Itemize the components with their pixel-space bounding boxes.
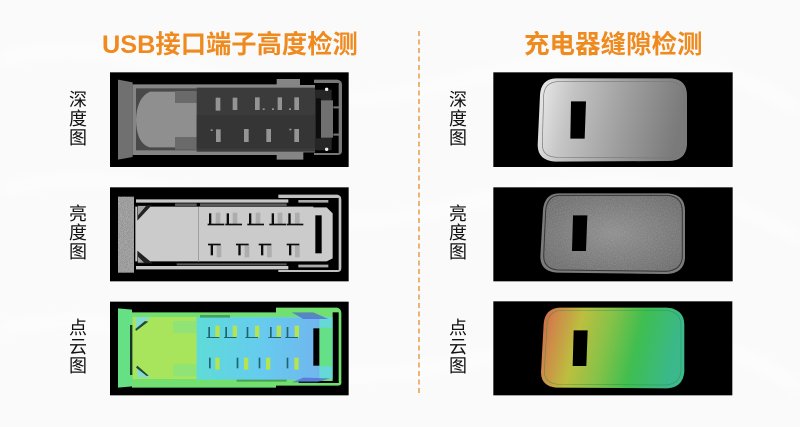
- label: depth map left: 图: [69, 128, 87, 148]
- image: charger point cloud: [493, 301, 732, 395]
- image: USB depth map: [110, 72, 349, 167]
- title: USB terminal height inspection: USB接口端子高度检测: [102, 31, 358, 59]
- label: depth map right: 图: [449, 128, 467, 148]
- dashed divider: [418, 31, 420, 396]
- label: brightness map left: 图: [69, 242, 87, 262]
- label: point cloud right: 点: [449, 318, 467, 338]
- label: point cloud left: 图: [69, 356, 87, 376]
- label: brightness map left: 亮: [69, 204, 87, 224]
- label: depth map left: 度: [69, 109, 87, 129]
- label: brightness map right: 亮: [449, 204, 467, 224]
- image: USB brightness map: [110, 187, 349, 281]
- title: charger gap inspection: 充电器缝隙检测: [524, 31, 703, 59]
- label: point cloud left: 点: [69, 318, 87, 338]
- image: USB point cloud: [110, 302, 349, 395]
- label: depth map right: 度: [449, 109, 467, 129]
- label: point cloud right: 图: [449, 356, 467, 376]
- label: brightness map left: 度: [69, 223, 87, 243]
- label: brightness map right: 图: [449, 242, 467, 262]
- label: depth map left: 深: [69, 90, 87, 110]
- label: point cloud left: 云: [69, 337, 87, 357]
- image: charger brightness map: [493, 187, 733, 281]
- label: point cloud right: 云: [449, 337, 467, 357]
- label: depth map right: 深: [449, 90, 467, 110]
- label: brightness map right: 度: [449, 223, 467, 243]
- image: charger depth map: [493, 72, 733, 167]
